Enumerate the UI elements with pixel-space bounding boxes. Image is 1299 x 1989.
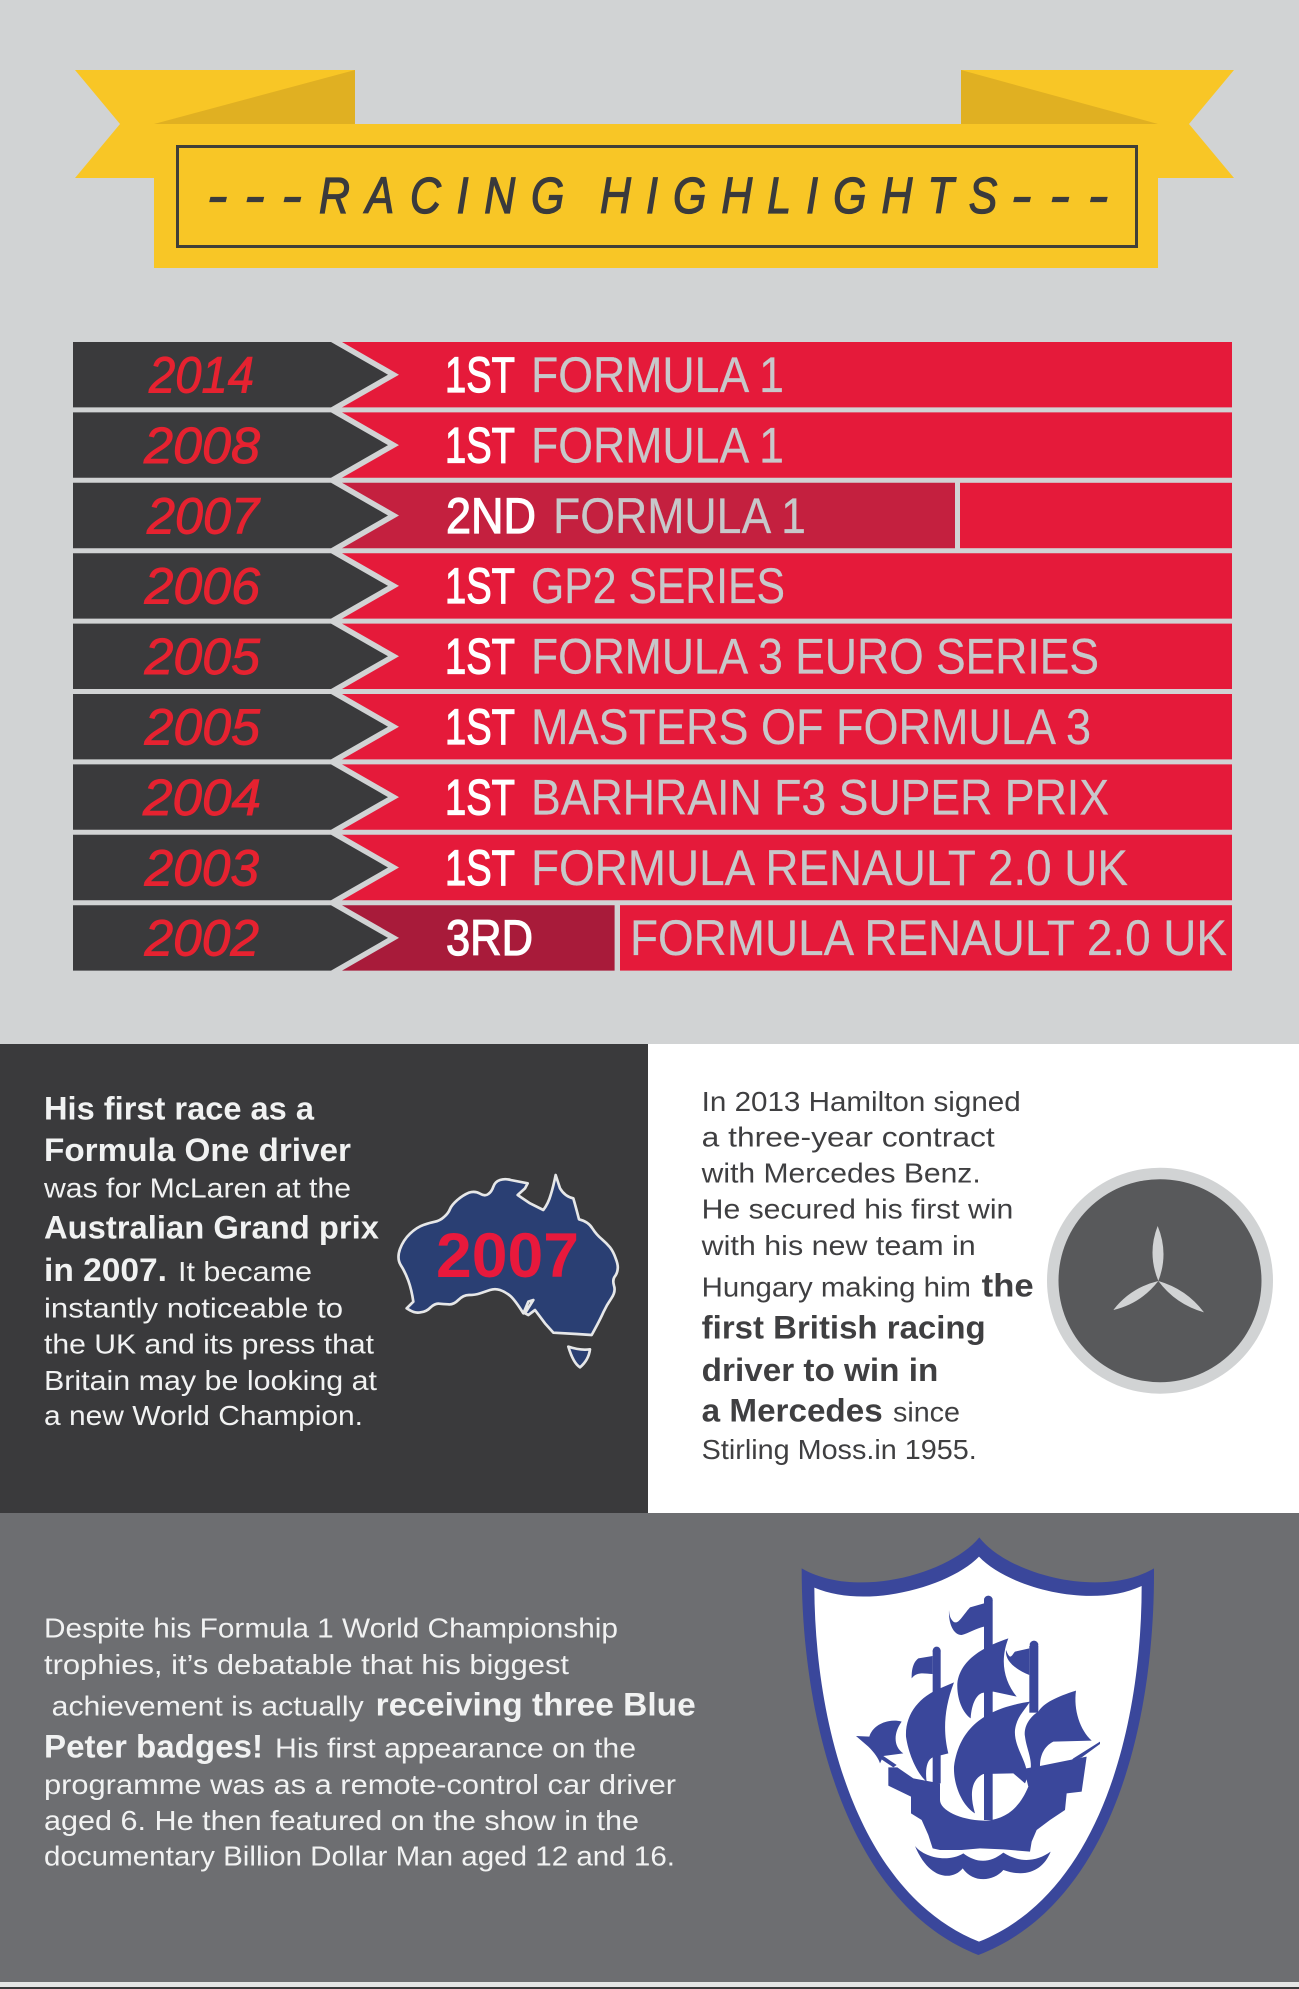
text block: Blue Peter badges: programme was as a remote-control car driver (44, 1769, 676, 1800)
text block: Blue Peter badges: achievement is actually (52, 1691, 364, 1722)
row 2003 (73, 835, 1232, 900)
text block: first race: the UK and its press that (44, 1329, 374, 1360)
row 2003: FORMULA RENAULT 2.0 UK (531, 840, 1128, 896)
row 2005 masters: 2005 (143, 698, 261, 756)
row 2005 masters: 1ST (445, 699, 515, 755)
text block: Mercedes contract: first British racing (702, 1309, 986, 1345)
text block: first race: in 2007. (44, 1252, 167, 1288)
panel: Blue Peter (0, 1513, 1299, 1989)
row 2014: 2014 (148, 346, 254, 404)
icon: Australia map: 2007 (436, 1221, 579, 1291)
title ribbon banner (75, 70, 1234, 268)
row 2008: FORMULA 1 (531, 417, 784, 473)
row 2004: BARHRAIN F3 SUPER PRIX (531, 769, 1109, 825)
row 2007: 2007 (146, 487, 261, 544)
row 2004 (73, 764, 1232, 830)
title: HIGHLIGHTS (600, 166, 997, 224)
text block: first race (43, 1090, 379, 1431)
text block: Blue Peter badges: aged 6. He then featured on the show in the (44, 1805, 639, 1836)
row 2005 euro series (73, 624, 1232, 689)
panel: Australian Grand Prix 2007 (0, 1044, 648, 1513)
row 2014: FORMULA 1 (531, 347, 784, 403)
text block: Blue Peter badges (44, 1612, 696, 1872)
row 2004: 2004 (142, 769, 261, 826)
text block: first race: Britain may be looking at (44, 1365, 377, 1396)
row 2005 euro series: FORMULA 3 EURO SERIES (531, 629, 1099, 685)
results table (73, 342, 1232, 971)
row 2005 euro series: 2005 (143, 628, 261, 685)
text block: first race: instantly noticeable to (44, 1292, 343, 1323)
text block: Blue Peter badges: His first appearance on the (275, 1732, 636, 1763)
text block: Mercedes contract: a three-year contract (702, 1122, 995, 1153)
text block: first race: His first race as a (44, 1090, 314, 1126)
row 2005 masters: MASTERS OF FORMULA 3 (531, 699, 1091, 755)
row 2003: 2003 (143, 839, 259, 896)
row 2002: 2002 (143, 910, 259, 967)
text block: first race: Australian Grand prix (44, 1209, 379, 1245)
row 2006: 1ST (445, 558, 515, 614)
text block: Mercedes contract: Stirling Moss.in 1955. (702, 1434, 977, 1465)
row 2006: GP2 SERIES (531, 558, 785, 614)
text block: Mercedes contract: with his new team in (701, 1230, 976, 1261)
row 2002: 3RD (446, 910, 533, 966)
text block: Mercedes contract: He secured his first win (702, 1194, 1013, 1225)
text block: first race: was for McLaren at the (43, 1172, 351, 1203)
text block: Blue Peter badges: trophies, it’s debatable that his biggest (44, 1649, 569, 1680)
text block: Mercedes contract (701, 1086, 1034, 1465)
title: RACING (319, 166, 564, 224)
row 2005 euro series: 1ST (445, 629, 515, 685)
text block: Blue Peter badges: Despite his Formula 1 World Championship (44, 1612, 618, 1643)
row 2014: 1ST (445, 347, 515, 403)
text block: Mercedes contract: driver to win in (702, 1352, 938, 1388)
row 2008 (73, 412, 1232, 478)
row 2004: 1ST (445, 769, 515, 825)
row 2002 (73, 905, 1232, 971)
row 2008: 2008 (143, 417, 261, 474)
text block: Mercedes contract: a Mercedes (702, 1393, 883, 1429)
title: --- (207, 167, 302, 224)
row 2007: FORMULA 1 (553, 488, 806, 544)
text block: Mercedes contract: In 2013 Hamilton signed (702, 1086, 1021, 1117)
row 2002: FORMULA RENAULT 2.0 UK (630, 910, 1227, 966)
text block: Mercedes contract: the (982, 1268, 1034, 1304)
icon: Australia map (398, 1175, 618, 1367)
row 2007 (73, 483, 1232, 548)
text block: Mercedes contract: since (893, 1397, 960, 1428)
text block: Blue Peter badges: receiving three Blue (376, 1687, 696, 1723)
icon: Blue Peter ship shield (802, 1537, 1154, 1955)
row 2003: 1ST (445, 840, 515, 896)
text block: Blue Peter badges: Peter badges! (44, 1728, 263, 1764)
title: --- (1011, 167, 1108, 224)
text block: Mercedes contract: Hungary making him (702, 1272, 971, 1303)
row 2007: 2ND (446, 488, 536, 544)
icon: Mercedes star (1047, 1168, 1273, 1394)
text block: first race: Formula One driver (44, 1132, 351, 1168)
row 2006 (73, 553, 1232, 619)
text block: first race: It became (178, 1256, 312, 1287)
row 2005 masters (73, 694, 1232, 759)
text block: first race: a new World Champion. (44, 1400, 363, 1431)
row 2008: 1ST (445, 417, 515, 473)
title (207, 166, 1108, 224)
row 2014 (73, 342, 1232, 407)
text block: Blue Peter badges: documentary Billion Dollar Man aged 12 and 16. (44, 1841, 675, 1872)
text block: Mercedes contract: with Mercedes Benz. (701, 1158, 981, 1189)
panel: Mercedes (648, 1044, 1299, 1513)
row 2006: 2006 (143, 558, 261, 615)
